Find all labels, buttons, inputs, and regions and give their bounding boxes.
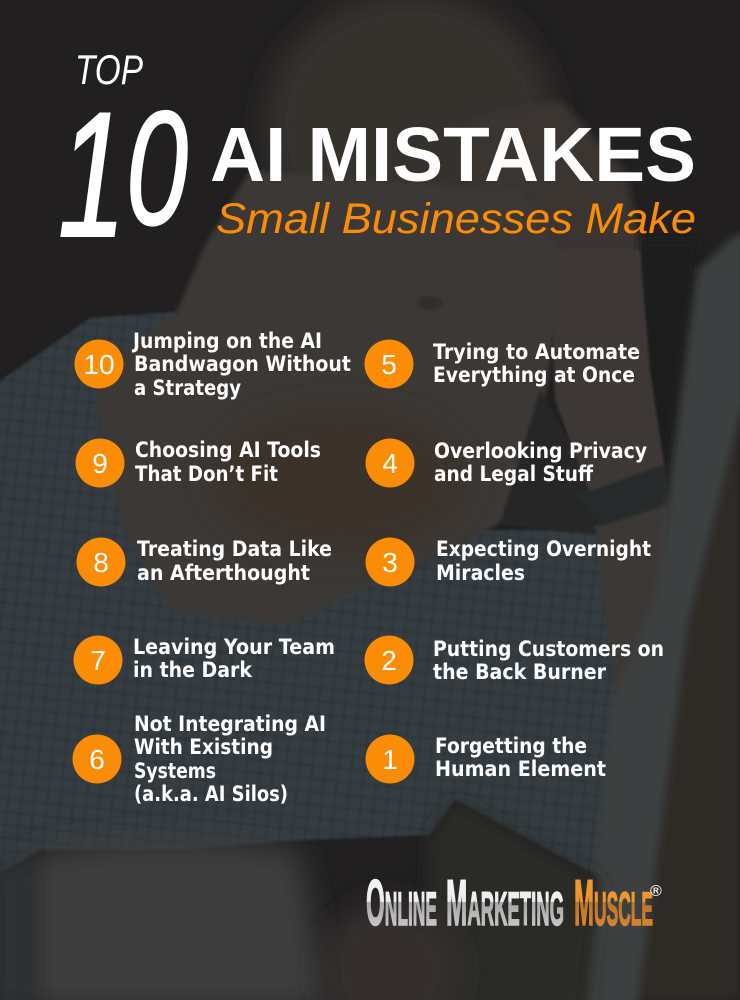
number badge 9 bbox=[76, 438, 124, 488]
dark gap between face and arm bbox=[500, 390, 600, 535]
subtitle: Small Businesses Make: Small Businesses Make bbox=[216, 195, 696, 243]
mistake 3 bbox=[366, 537, 651, 586]
number badge 8: 8 bbox=[93, 547, 109, 578]
dark laptop base bbox=[420, 800, 600, 1000]
beard bbox=[210, 405, 470, 555]
hand on head bbox=[470, 100, 645, 270]
hair bbox=[265, 0, 555, 260]
man's plaid shirt bbox=[0, 312, 650, 880]
number badge 2: 2 bbox=[381, 645, 397, 676]
label 8: Treating Data Like bbox=[137, 537, 332, 561]
number badge 8 bbox=[76, 538, 126, 586]
label 1 bbox=[435, 734, 606, 781]
label 2: the Back Burner bbox=[433, 660, 607, 684]
label 8: an Afterthought bbox=[137, 561, 310, 585]
label 3: Miracles bbox=[436, 561, 525, 585]
label 4: Overlooking Privacy bbox=[434, 439, 647, 463]
dark backdrop behind arm bbox=[640, 240, 700, 470]
label 4: and Legal Stuff bbox=[434, 462, 594, 486]
label 6: (a.k.a. AI Silos) bbox=[134, 782, 288, 806]
face and neck bbox=[95, 170, 565, 625]
lower forearm bbox=[595, 500, 668, 700]
label 3 bbox=[436, 537, 651, 585]
label 1: Human Element bbox=[435, 757, 606, 781]
number badge 10 bbox=[74, 340, 124, 388]
wristwatch strap bbox=[575, 464, 668, 526]
number badge 2 bbox=[364, 636, 414, 684]
logo: Online Marketing Muscle: ONLINE bbox=[366, 866, 437, 939]
registered mark: ® bbox=[650, 883, 662, 900]
mistake 6 bbox=[72, 712, 326, 806]
label 9: Choosing AI Tools bbox=[135, 438, 321, 462]
number badge 1: 1 bbox=[382, 744, 398, 775]
logo: Online Marketing Muscle: MARKETING bbox=[446, 866, 564, 939]
number badge 1 bbox=[366, 734, 414, 784]
number badge 4: 4 bbox=[382, 448, 398, 479]
mistake 10 bbox=[74, 329, 351, 400]
mistake 5 bbox=[364, 340, 640, 388]
title: AI MISTAKES: AI MISTAKES bbox=[210, 112, 696, 198]
label 4 bbox=[434, 439, 647, 486]
label 10: Bandwagon Without bbox=[134, 352, 351, 376]
raised forearm bbox=[550, 250, 665, 495]
eye bbox=[418, 296, 442, 310]
mistake 1 bbox=[366, 734, 606, 784]
number badge 7 bbox=[74, 636, 122, 684]
label 7 bbox=[133, 635, 335, 682]
label 3: Expecting Overnight bbox=[436, 537, 651, 561]
number badge 6 bbox=[72, 734, 122, 784]
label 10 bbox=[131, 329, 351, 400]
number badge 9: 9 bbox=[92, 448, 108, 479]
label 7: Leaving Your Team bbox=[133, 635, 335, 659]
label 7: in the Dark bbox=[133, 658, 253, 682]
label 6: Systems bbox=[134, 759, 216, 783]
title: 10: 0 bbox=[126, 78, 188, 259]
number badge 5 bbox=[364, 340, 414, 388]
label 5 bbox=[433, 340, 640, 387]
title: 10: 1 bbox=[58, 75, 126, 274]
label 5: Everything at Once bbox=[433, 363, 635, 387]
number badge 7: 7 bbox=[90, 645, 106, 676]
number badge 4 bbox=[366, 438, 414, 488]
blurred hand in foreground bbox=[30, 839, 330, 1000]
dark brown right side bbox=[635, 420, 740, 1000]
brown blur at bottom centre bbox=[320, 900, 460, 1000]
number badge 3: 3 bbox=[382, 547, 398, 578]
mistake 7 bbox=[74, 635, 335, 684]
title block bbox=[58, 46, 696, 274]
label 2 bbox=[433, 637, 664, 684]
label 6: With Existing bbox=[134, 735, 273, 759]
logo: Online Marketing Muscle bbox=[366, 866, 662, 939]
label 8 bbox=[137, 537, 332, 585]
blurred lower left edge bbox=[0, 860, 30, 1000]
number badge 6: 6 bbox=[89, 744, 105, 775]
mistake 8 bbox=[76, 537, 332, 586]
label 2: Putting Customers on bbox=[433, 637, 664, 661]
label 1: Forgetting the bbox=[435, 734, 587, 758]
label 9: That Don’t Fit bbox=[135, 462, 278, 486]
label 9 bbox=[135, 438, 321, 486]
title: TOP: TOP bbox=[75, 46, 143, 93]
label 10: a Strategy bbox=[134, 376, 241, 400]
label 10: Jumping on the AI bbox=[131, 329, 322, 353]
number badge 5: 5 bbox=[381, 349, 397, 380]
mistake 9 bbox=[76, 438, 321, 488]
label 6 bbox=[134, 712, 326, 806]
mistake 4 bbox=[366, 438, 647, 488]
label 6: Not Integrating AI bbox=[134, 712, 326, 736]
mistake 2 bbox=[364, 636, 664, 684]
bright laptop screen edge bbox=[583, 235, 740, 1000]
number badge 10: 10 bbox=[83, 349, 115, 380]
label 5: Trying to Automate bbox=[433, 340, 640, 364]
number badge 3 bbox=[366, 538, 414, 586]
